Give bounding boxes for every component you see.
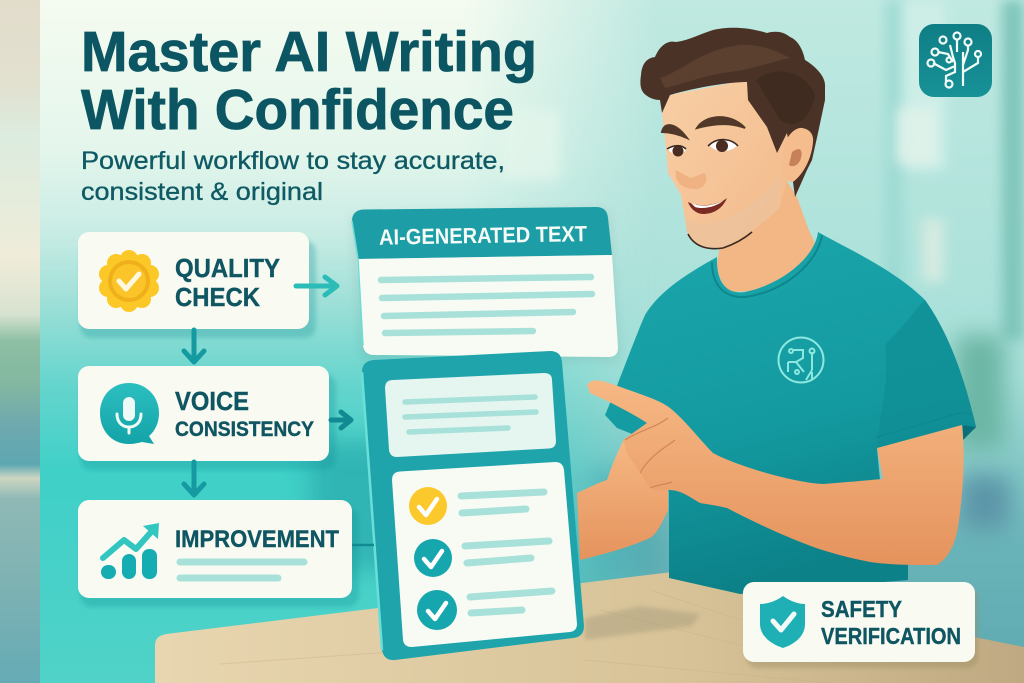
tablet top card [385,373,556,457]
nose [676,170,706,189]
arrow: quality to voice [184,330,204,362]
subtitle: Powerful workflow to stay accurate, [81,147,505,175]
card: improvement [78,500,359,607]
ear [783,128,813,182]
subtitle [81,147,505,206]
panel: AI-generated text [352,207,618,359]
card: voice consistency [78,366,336,470]
right arm and hand [587,380,964,565]
arrow: voice to improvement [184,462,204,495]
t-shirt [605,232,976,594]
person [577,28,976,594]
label: quality check: CHECK [175,282,260,312]
logo badge [919,24,992,97]
check yellow [409,487,447,525]
icon: microphone bubble [100,383,159,444]
subtitle: consistent & original [81,178,323,206]
label: voice consistency: VOICE [175,386,249,416]
icon: shield [760,596,805,648]
mouth [688,198,727,214]
label: voice consistency [175,386,314,441]
check teal 2 [417,590,457,630]
card: quality check [78,232,316,338]
label: voice consistency: CONSISTENCY [175,418,314,441]
icon: quality badge [99,250,159,312]
hair [640,28,825,197]
label: safety verification [821,596,961,649]
tablet checklist card [392,462,577,647]
shirt chest logo [778,338,824,382]
face [662,80,792,249]
panel: checklist tablet [362,351,584,660]
neck [716,170,818,292]
table [155,572,1024,683]
title: Master AI Writing [81,20,537,84]
label: safety verification: VERIFICATION [821,623,961,649]
check teal 1 [414,539,452,577]
heading: AI-generated text: AI-GENERATED TEXT [379,221,588,250]
label: safety verification: SAFETY [821,596,902,622]
label: quality check [175,253,280,312]
card: safety verification [743,582,978,668]
title: With Confidence [81,78,514,142]
arrow: quality to AI text [296,277,337,295]
eyebrows [662,117,745,138]
title [81,20,537,142]
label: improvement: IMPROVEMENT [175,526,339,553]
label: quality check: QUALITY [175,253,280,283]
left arm [577,438,668,560]
icon: growth chart [101,523,159,579]
connector: improvement to tablet [352,544,374,546]
text placeholder lines [180,562,304,578]
arrow: voice to tablet [331,412,351,428]
eyes [667,140,738,156]
text placeholder lines [381,277,592,333]
